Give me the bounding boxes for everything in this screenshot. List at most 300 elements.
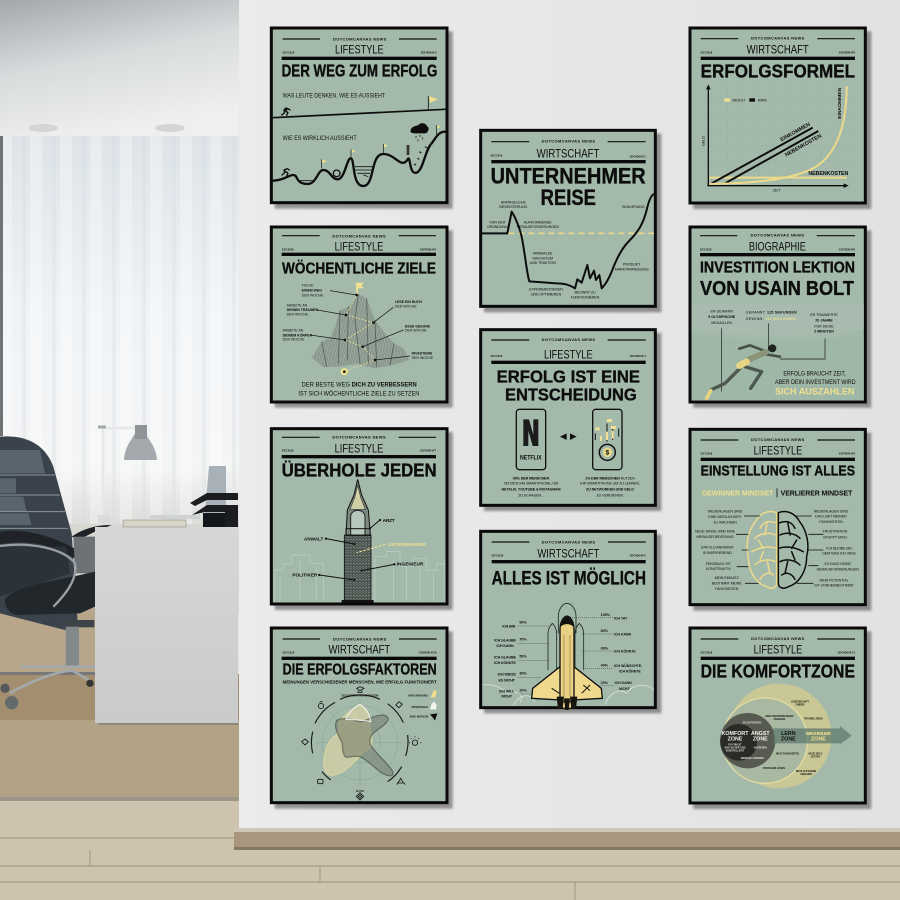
axis labels: GELD [701,136,705,146]
masthead: EST.2018 [700,247,712,251]
right statements: NICHT [619,687,631,691]
goal labels: DER WOCHE [395,304,417,308]
left caption [502,476,560,497]
caption: perceived path: WAS LEUTE DENKEN, WIE ES AUSSIEHT [283,92,385,99]
baseboard [234,828,900,850]
closing statement: SICH AUSZAHLEN [775,387,854,397]
masthead: LIFESTYLE [335,44,384,57]
left statements: ICH BIN [502,624,516,628]
ceiling spot lights [28,124,185,132]
percentage labels: 100% [601,613,611,617]
curve labels: NEBENKOSTEN [808,171,848,177]
growth zone text: LEIDENSCHAFT [791,700,810,703]
growth zone text: FINDEN [796,704,805,706]
journey labels: WACHSTUM [532,256,553,260]
career labels: UNTERNEHMER [388,542,427,547]
yellow income curve [709,86,847,184]
masthead: EDITION Nº4 [630,354,646,358]
white desk [95,527,238,725]
frame shadow [275,31,453,209]
left statements: ICH KANN [496,644,514,648]
legend: MITBÜRGER [412,704,428,709]
journey labels: ANFÄNGLICHE [501,200,526,204]
wood panel behind chair [0,606,100,676]
career labels: ARZT [383,518,395,523]
axis icons [302,687,421,800]
loser mindset labels: DAS LIMIT MEINER [815,515,847,519]
title: UNTERNEHMER [491,163,646,188]
legend: ARM [758,98,767,103]
percentage labels: 30% [519,672,527,676]
learning zone circle [722,698,808,783]
masthead: WIRTSCHAFT [747,43,809,56]
mindset heading: winner: GEWINNER MINDSET [702,490,774,497]
journey labels: BEGEISTERUNG [499,205,528,209]
masthead [282,637,437,660]
career labels: INGENIEUR [397,562,424,567]
left caption: NETFLIX, YOUTUBE & INSTAGRAM [502,488,560,492]
medal fact: MEDAILLEN [711,321,732,325]
masthead [701,636,856,660]
window curtains [0,136,240,526]
closing statement: ABER DEIN INVESTMENT WIRD [775,379,856,386]
fear zone text: SELBSTZWEIFEL [743,722,763,724]
frame shadow [484,333,661,511]
title: ÜBERHOLE JEDEN [282,460,437,481]
legend: REICH [732,98,745,103]
wooden floor [0,672,240,851]
poster: Erfolgsformel [690,28,871,209]
journey labels: MARKTANPASSUNG [615,267,649,271]
break-even dashed line [508,231,654,236]
skyline [275,552,445,602]
masthead: DOTCOMCANVAS NEWS [542,539,595,544]
left statements: ICH WILL [499,689,515,693]
frame [690,227,865,402]
masthead: WIRTSCHAFT [328,644,390,657]
percentage labels: 70% [519,638,527,642]
masthead: EDITION Nº2 [421,50,437,54]
masthead: LIFESTYLE [754,444,803,457]
masthead: DOTCOMCANVAS NEWS [542,139,595,144]
masthead: EDITION Nº9 [839,451,856,455]
left caption: NUTZEN IHR SMARTPHONE, UM [504,482,558,486]
water and boulder [300,167,373,181]
caption: real path: WIE ES WIRKLICH AUSSIEHT [283,135,357,142]
frame shadow [693,433,871,611]
growth zone text: ANGEHEN [800,773,812,776]
radar outer arcs [311,695,408,782]
frame shadow [275,631,453,809]
comfort zone text: KONTROLLIERT [726,750,745,752]
dark profile shape [336,715,393,776]
growth zone text: NEUE AUFGABEN [796,770,816,773]
goal labels: DER WOCHE [287,312,309,316]
poster: Die Erfolgsfaktoren [271,628,453,809]
poster: Unternehmer Reise [481,130,661,312]
career labels [292,518,427,578]
winner mindset labels: BESTIMMT MEINE [712,581,742,585]
growth arrow [773,726,852,744]
frame shadow [484,134,661,312]
journey labels [487,200,649,299]
learning zone text: HERAUSFORDERUNGEN [765,715,794,718]
office chair [0,436,112,709]
comfort zone text: KOMFORT [722,731,749,737]
journey labels: FUNKTIONIEREN [571,295,600,299]
title: REISE [541,185,596,210]
masthead: DOTCOMCANVAS NEWS [332,434,386,439]
brain: black hemisphere [778,512,808,588]
time and money fact [746,311,797,321]
goal labels: INVESTIERE [412,352,433,356]
growth zone circle [727,684,832,788]
masthead: EST.2018 [282,449,294,453]
summit flag [356,283,364,295]
foreground floor [0,850,900,900]
growth zone text: SETZEN [811,757,820,759]
winding path [273,132,445,186]
loser mindset labels: IST VORHERBESTIMMT [814,584,855,588]
mindset heading: loser: VERLIERER MINDSET [781,490,853,497]
journey labels: GRÜNDUNG [487,225,508,229]
training fact: FÜR DIESE [814,324,834,328]
frame shadow [484,535,661,713]
title [497,366,640,405]
masthead [282,434,437,458]
masthead [282,37,437,60]
closing statement [298,383,419,398]
right statements [614,616,642,691]
curve labels: EINKOMMEN [837,87,843,119]
journey labels: UND OPTIMIEREN [531,292,562,296]
loser mindset labels: ICH MAG KEINE [824,562,851,566]
masthead: EST.2018 [701,650,713,654]
masthead: DOTCOMCANVAS NEWS [751,437,805,442]
left statements: ICH GLAUBE [494,638,517,642]
mindset divider [776,488,778,497]
masthead: EDITION Nº1 [630,155,646,159]
frame [481,330,655,505]
frame shadow [693,230,871,408]
goal labels: FOLGE [302,283,314,287]
learning zone text [763,715,799,770]
right caption: ZU NETWORKEN UND GELD [586,488,634,492]
growth zone text [791,700,832,776]
goal labels: LESE EIN BUCH [395,300,422,304]
frame [271,429,447,604]
percentage labels: 40% [601,664,609,668]
pointer dots [318,519,395,581]
masthead: WIRTSCHAFT [537,547,599,560]
training fact: 20 JAHRE [815,319,833,323]
title: DIE ERFOLGSFAKTOREN [283,661,437,678]
masthead: DOTCOMCANVAS NEWS [751,636,805,641]
title [700,259,855,300]
loser mindset labels: MEIN POTENTIAL [819,578,849,582]
frame [481,531,655,708]
masthead [491,139,646,163]
phone: finance [593,409,622,470]
axis tiny labels: SELBSTWERT UND MOTIVATION [342,695,379,698]
masthead: WIRTSCHAFT [537,147,599,160]
rocks [414,144,432,165]
fear zone text: AUSREDEN [754,747,767,750]
goal labels: DEINEN TRÄUMEN [287,308,319,312]
frame [481,130,655,306]
ceiling [0,0,240,137]
title [491,163,646,210]
winner mindset labels: EINE MÖGLICHKEIT [708,515,742,519]
journey labels: VOR DER [489,220,506,224]
frame [271,628,447,803]
storm cloud [411,123,429,141]
masthead: LIFESTYLE [335,240,384,253]
masthead: EST.2018 [701,451,713,455]
percentage labels: 20% [601,681,609,685]
masthead: DOTCOMCANVAS NEWS [751,36,805,41]
clouds [483,685,654,705]
winner mindset labels: NEUE DINGE SIND EINE [695,529,736,533]
masthead [282,233,437,256]
flags along the path [322,125,441,168]
comfort zone text: DICH SICHER UND [725,747,746,749]
desk items [123,466,238,527]
percentage labels [519,613,611,693]
masthead: EDITION Nº6 [839,50,856,54]
loser mindset labels: DEM WAS ICH WEIß [822,552,856,556]
radar grid [317,699,403,786]
training fact: 2 MINUTEN [814,330,834,334]
black income and cost lines [712,128,818,183]
sprinter figure [707,344,780,398]
comfort zone text [722,731,749,752]
title: DIE KOMFORTZONE [701,661,855,682]
masthead: EST.2018 [282,247,294,251]
shuttle orbiter [532,616,602,710]
masthead: LIFESTYLE [754,643,803,656]
poster: Alles ist möglich [481,531,661,713]
goal labels: DER WOCHE [405,329,427,333]
loser mindset labels: HERAUSFORDERUNGEN [817,568,859,572]
percentage labels: 60% [601,646,609,650]
fire ring [333,170,340,177]
masthead: BIOGRAPHIE [749,241,806,254]
legend [408,690,437,721]
left statements: NICHT [501,695,513,699]
fear zone text: ZONE [753,737,768,743]
learning zone text: LERN [781,731,796,737]
right caption [580,476,640,497]
masthead: DOTCOMCANVAS NEWS [333,637,387,642]
goal labels [283,283,434,360]
poster: Erfolg ist eine Entscheidung [481,330,661,511]
masthead [701,437,856,461]
right statements: ICH WÜNSCHTE, [614,663,642,668]
right statements: ICH TAT [614,616,628,620]
learning zone text: PROBLEME LÖSEN [763,767,785,770]
masthead [700,233,856,256]
percentage labels: 90% [519,621,527,625]
axis labels [701,136,781,193]
curve labels: EINKOMMEN [780,122,812,143]
axes [707,88,846,186]
masthead: EST.2018 [283,650,295,654]
title: VON USAIN BOLT [700,277,854,300]
frame [690,28,865,203]
left statements: ICH GLAUBE [494,655,517,659]
journey labels: MINIMALES [533,252,553,256]
training fact [810,313,838,334]
closing statement: IST SICH WÖCHENTLICHE ZIELE ZU SETZEN [298,391,419,398]
left caption: ZU SCHAUEN... [518,493,544,497]
growth zone text: TRÄUME LEBEN [804,717,823,720]
fact pointers [722,323,825,392]
career labels: POLITIKER [292,573,318,578]
masthead: EDITION Nº7 [420,449,437,453]
goal labels: EINEM WEG [302,289,322,293]
frame [690,628,865,803]
loser mindset labels [814,509,859,588]
poster: Wöchentliche Ziele [271,227,453,408]
percentage labels: 10% [519,689,527,693]
frame [271,28,447,203]
skyscraper [342,479,374,603]
masthead [492,539,646,563]
frame shadow [693,31,871,209]
medal fact: ER GEWANN [710,310,733,314]
frame shadow [693,631,871,809]
masthead: EDITION Nº10 [419,650,437,654]
runner icon [282,108,290,115]
fear zone text: ANGST [751,731,770,737]
straight path line [273,109,445,118]
yellow cost line [709,175,847,181]
left statements [494,624,517,699]
journey labels: BEGINNT ZU [574,291,596,295]
fear zone text [741,722,770,760]
axis arrows [706,84,849,188]
desk lamp [98,425,157,523]
right statements: ICH KANN [614,633,632,637]
journey labels: EXPERIMENTIEREN [529,288,563,292]
career labels: ANWALT [304,536,323,541]
masthead: DOTCOMCANVAS NEWS [751,233,804,238]
title: ALLES IST MÖGLICH [492,566,646,589]
left statements: ES NICHT [499,678,516,682]
masthead: DOTCOMCANVAS NEWS [542,337,595,342]
journey labels: AUFKOMMENDE [524,220,552,224]
masthead: EDITION Nº3 [420,247,437,251]
frame [271,227,447,402]
fear zone circle [720,713,775,768]
label connectors [736,516,823,583]
winner mindset labels: MEIN EINSATZ [715,576,740,580]
masthead: EDITION Nº11 [838,650,856,654]
title: WÖCHENTLICHE ZIELE [282,258,436,277]
frame [690,429,865,605]
training fact: ER TRAINIERTE [810,313,838,317]
loser mindset labels: FRUSTRATION [823,530,848,534]
winner mindset labels: ERFOLG ANDERER [701,546,734,550]
phone: finance: $ [605,450,609,457]
journey labels: PRODUKT [623,262,641,266]
closing statement: DER BESTE WEG DICH ZU VERBESSERN [302,383,417,389]
learning zone text: ZONE [781,737,796,743]
axis labels: ZEIT [773,189,781,193]
journey labels: HERAUSFORDERUNGEN [517,225,559,229]
journey labels: SKALIERUNG [622,205,645,209]
left statements: ICH WEISS [498,672,516,676]
winner mindset labels: HERAUSFORDERUNG [696,535,734,539]
poster: Einstellung ist alles [690,429,871,611]
title: ERFOLGSFORMEL [701,61,855,82]
masthead: EDITION Nº8 [839,247,856,251]
curve labels [780,87,848,177]
masthead: DOTCOMCANVAS NEWS [332,233,386,238]
painted wall [239,0,900,829]
phone: Netflix: NETFLIX [520,454,542,461]
chart grid [708,86,848,185]
masthead: LIFESTYLE [335,442,384,455]
winner mindset labels: IS INSPIRIEREND [703,551,732,555]
winner mindset labels: ZU WACHSEN [713,520,737,524]
mountain illustration [312,294,409,368]
time and money fact: GEWINN: 119 MILLIONEN [746,317,796,321]
left statements: ICH KÖNNTE [494,660,517,665]
poster: Der Weg zum Erfolg [271,28,453,209]
journey curve [482,194,654,288]
runner on winding path [282,169,289,176]
frame shadow [275,432,453,610]
poster: Überhole Jeden [271,429,453,610]
career pointers [319,520,394,580]
right statements: ICH KANN [615,681,632,685]
right caption: 1% DER MENSCHEN NUTZEN [585,476,635,480]
closing statement: ERFOLG BRAUCHT ZEIT, [783,371,846,378]
loser mindset labels: NIEDERLAGEN SIND [814,509,849,513]
yellow profile shape [324,705,372,775]
route dotted line [344,295,375,372]
title: INVESTITION LEKTION [700,259,855,276]
masthead: DOTCOMCANVAS NEWS [333,37,387,42]
route stops [344,294,376,361]
fear zone text: MEINUNG ANDERER [741,757,764,760]
growth zone text: NEUE ZIELE [808,754,823,756]
winner mindset labels: FEEDBACK IST [706,562,732,566]
white profile shape [346,704,371,722]
loser mindset labels: FÄHIGKEITEN [819,520,843,524]
winner mindset labels: KONSTRUKTIV [706,567,731,571]
frame shadow [275,230,453,408]
stadium track [692,335,864,401]
right caption: IHR SMARTPHONE UM ZU LERNEN, [580,482,640,486]
comfort zone circle [720,724,757,761]
title: ENTSCHEIDUNG [505,385,637,405]
winner mindset labels [695,509,743,591]
left caption: 99% DER MENSCHEN [513,476,550,480]
goal connectors [310,291,410,360]
choice arrows [560,433,577,440]
goal labels: ESSE GESUND [405,324,431,328]
masthead [491,337,646,364]
goal labels: ARBEITE AN [283,329,304,333]
masthead: EST.2018 [283,50,295,54]
start pin [341,368,348,375]
title: DER WEG ZUM ERFOLG [282,61,437,81]
entrepreneur pointer [357,544,385,553]
poster: Die Komfortzone [690,628,871,809]
